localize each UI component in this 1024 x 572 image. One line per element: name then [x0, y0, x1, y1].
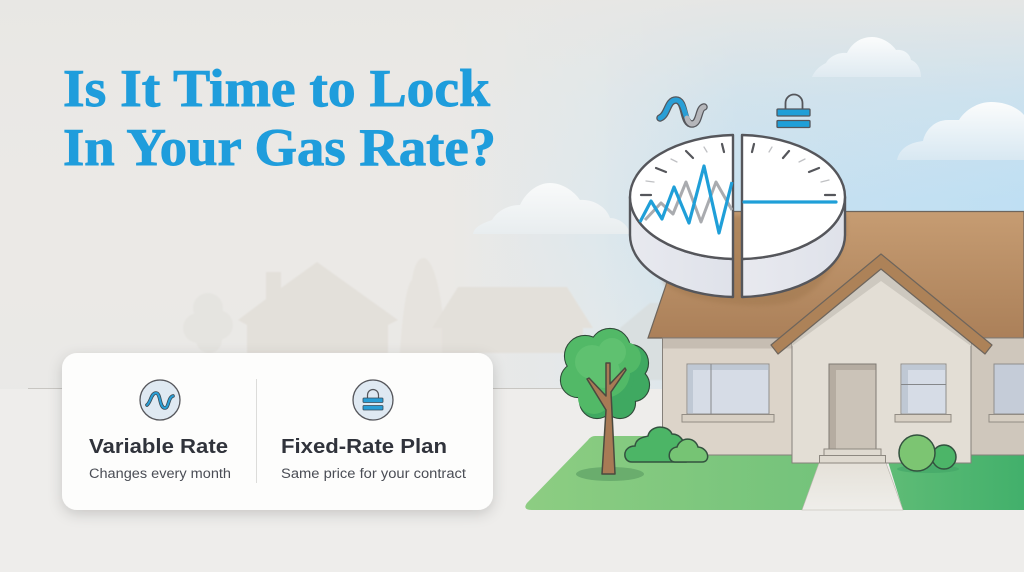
lawn left — [525, 436, 819, 510]
title: In Your Gas Rate? — [63, 119, 496, 177]
legend card — [62, 353, 493, 510]
left wall — [662, 338, 792, 455]
card divider — [256, 379, 258, 483]
tree canopy — [561, 329, 649, 418]
flat blue line — [744, 200, 836, 204]
bushes left — [625, 427, 708, 462]
fixed rate description: Same price for your contract — [281, 466, 466, 481]
lawn right — [886, 455, 1024, 510]
grey price line — [645, 182, 732, 222]
icon: variable wave — [660, 100, 704, 124]
right wall — [971, 338, 1024, 455]
gable front wall — [792, 262, 971, 463]
background house two — [432, 287, 593, 353]
variable rate description: Changes every month — [89, 466, 231, 481]
cloud right — [897, 102, 1024, 160]
icon: fixed rate badge — [353, 380, 393, 420]
background bush — [183, 293, 233, 353]
background tall tree — [400, 258, 445, 353]
meter shadow on roof — [664, 215, 846, 305]
variable rate heading: Variable Rate — [89, 436, 228, 458]
left window — [682, 364, 774, 422]
door — [829, 364, 876, 449]
tree trunk — [587, 363, 626, 474]
blue price line — [640, 166, 732, 233]
right tick marks — [752, 144, 835, 195]
left tick marks — [641, 144, 724, 195]
tree — [561, 329, 649, 481]
background house three — [620, 303, 670, 380]
title: Is It Time to Lock — [63, 60, 491, 118]
right window — [895, 364, 951, 422]
icon: lock — [777, 94, 810, 128]
roof — [648, 212, 1024, 338]
faded background neighbourhood — [183, 258, 670, 380]
left half: variable — [630, 135, 733, 297]
fixed rate item — [281, 380, 466, 481]
cloud left of meter — [473, 183, 630, 234]
card background — [62, 353, 493, 510]
bushes right — [897, 435, 959, 473]
steps — [820, 449, 886, 463]
cloud top right — [812, 37, 921, 77]
fixed rate heading: Fixed-Rate Plan — [281, 436, 447, 458]
variable rate item — [89, 380, 231, 481]
walkway — [802, 463, 903, 510]
tree shadow — [576, 467, 644, 481]
right half: fixed — [742, 135, 845, 297]
icon: variable rate badge — [140, 380, 180, 420]
title — [63, 60, 496, 177]
main house — [525, 212, 1024, 510]
gable trim — [771, 254, 992, 354]
split gas meter dial — [630, 135, 845, 297]
background house one — [238, 262, 398, 353]
